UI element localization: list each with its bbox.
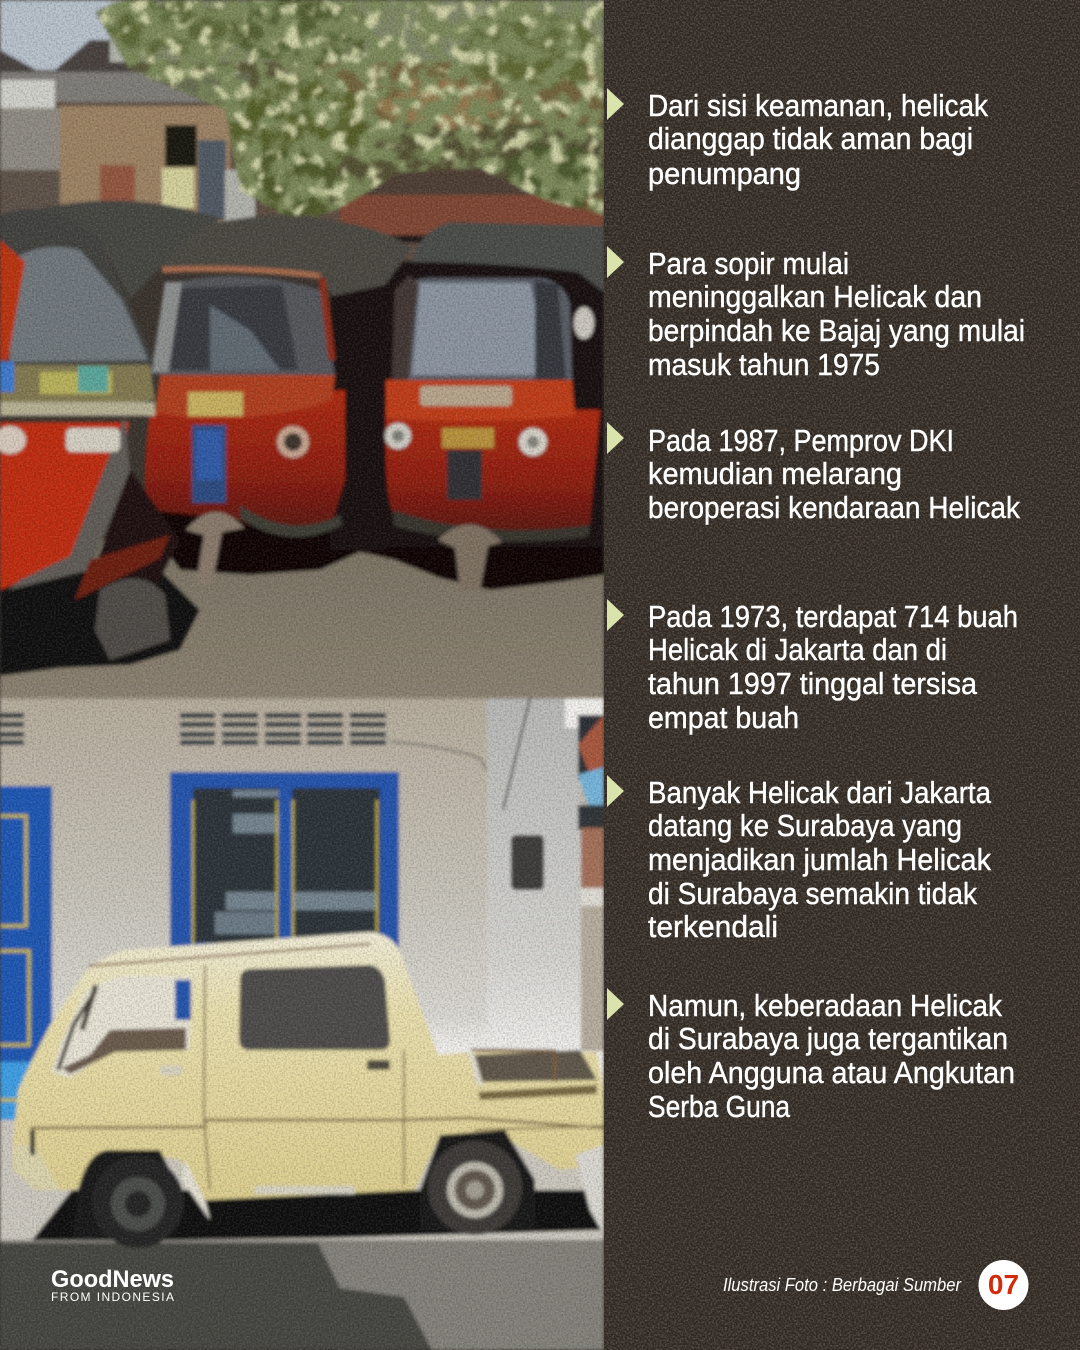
wall (0, 696, 604, 1090)
text block 4: Helicak di Jakarta dan di (648, 632, 947, 667)
bullet 2: drivers (607, 246, 1025, 382)
bullet 4: numbers (607, 599, 1018, 735)
text block 5: menjadikan jumlah Helicak (648, 842, 991, 877)
vehicle: left bajaj (0, 209, 180, 660)
text block 1: dianggap tidak aman bagi (648, 121, 973, 156)
text block 1 (648, 88, 988, 191)
text block 5: Banyak Helicak dari Jakarta (648, 775, 992, 810)
text block 3: Pada 1987, Pemprov DKI (648, 423, 954, 458)
text block 4: empat buah (648, 700, 799, 735)
text block 5: datang ke Surabaya yang (648, 808, 962, 843)
text block 2: meninggalkan Helicak dan (648, 279, 982, 314)
photo credit: Ilustrasi Foto : Berbagai Sumber (723, 1275, 962, 1295)
wire and meter on pillar (503, 698, 530, 810)
icon: arrow marker (607, 422, 624, 454)
bullet 3: 1987 ban (607, 422, 1020, 525)
photo: parked red bajaj vehicles (0, 0, 604, 700)
truck rear window (239, 965, 390, 1050)
text block 5 (648, 775, 992, 944)
icon: arrow marker (607, 988, 624, 1020)
vehicle: right bajaj (372, 222, 604, 590)
panel: text background (604, 0, 1080, 1350)
wall vents (0, 713, 386, 745)
front wheel (92, 1156, 184, 1248)
truck shadow (32, 1190, 604, 1240)
ground shadow under vehicles (0, 560, 200, 676)
text block 2: Para sopir mulai (648, 246, 849, 281)
text block 2: masuk tahun 1975 (648, 347, 880, 382)
text block 6: Serba Guna (648, 1089, 791, 1124)
logo: GoodNews from Indonesia: GoodNews (51, 1266, 174, 1293)
rear wheel (428, 1141, 522, 1235)
text block 6: di Surabaya juga tergantikan (648, 1021, 1008, 1056)
bullet 1: security (607, 88, 988, 191)
wheel arches (72, 1148, 170, 1236)
icon: arrow marker (607, 246, 624, 278)
blue window (170, 772, 399, 972)
logo: GoodNews from Indonesia: FROM INDONESIA (51, 1290, 174, 1304)
bullet 5: Surabaya (607, 775, 992, 944)
text block 4 (648, 599, 1018, 735)
text block 6: Namun, keberadaan Helicak (648, 988, 1002, 1023)
road shadow (0, 1243, 432, 1350)
text block 4: tahun 1997 tinggal tersisa (648, 666, 978, 701)
icon: arrow marker (607, 775, 624, 807)
page number badge (978, 1260, 1028, 1310)
truck side window front (52, 976, 192, 1078)
bullet 6: Angguna (607, 988, 1015, 1124)
pillar (487, 698, 581, 1068)
ground (0, 1120, 604, 1245)
neighbouring building strip (578, 715, 604, 1051)
text block 5: di Surabaya semakin tidak (648, 876, 977, 911)
icon: arrow marker (607, 88, 624, 120)
text block 6 (648, 988, 1015, 1124)
door seams and handles (204, 965, 404, 1190)
background: tree foliage (90, 0, 604, 230)
text block 2: berpindah ke Bajaj yang mulai (648, 313, 1025, 348)
truck bed (474, 1050, 597, 1082)
background: buildings behind the vehicles (0, 0, 604, 260)
vehicle: middle bajaj (145, 215, 412, 585)
text block 4: Pada 1973, terdapat 714 buah (648, 599, 1018, 634)
text block 3 (648, 423, 1020, 525)
text block 3: kemudian melarang (648, 456, 902, 491)
text block 2 (648, 246, 1025, 382)
page number badge: 07 (988, 1269, 1019, 1300)
text block 6: oleh Angguna atau Angkutan (648, 1055, 1015, 1090)
text block 1: penumpang (648, 156, 801, 191)
truck body (12, 932, 604, 1248)
photo grain overlay (0, 0, 604, 1350)
photo: old cream helicak truck (0, 698, 604, 1350)
background: ground / road (0, 540, 604, 700)
text block 5: terkendali (648, 909, 778, 944)
text block 3: beroperasi kendaraan Helicak (648, 490, 1020, 525)
text block 1: Dari sisi keamanan, helicak (648, 88, 988, 123)
icon: arrow marker (607, 599, 624, 631)
road (0, 1240, 604, 1350)
vehicle: left bajaj roof rear (40, 200, 222, 300)
blue door (0, 786, 52, 1126)
